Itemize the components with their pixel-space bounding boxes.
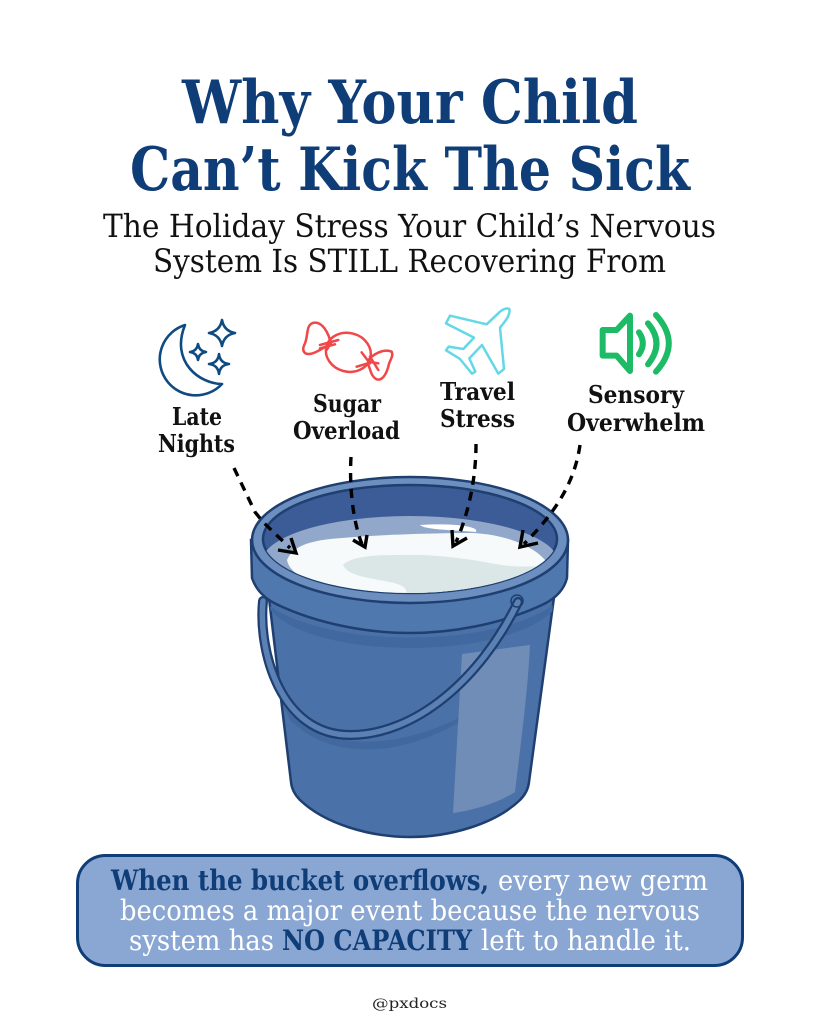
bucket handle bbox=[262, 595, 523, 735]
callout line 1: every new germ bbox=[498, 864, 708, 897]
label: Late Nights: Nights bbox=[158, 429, 235, 458]
arrow: sensory overwhelm to bucket bbox=[520, 445, 580, 547]
bucket illustration bbox=[251, 477, 568, 837]
subtitle: The Holiday Stress Your Child’s Nervous bbox=[103, 207, 716, 245]
icon: candy bbox=[303, 323, 392, 380]
label: Sensory Overwhelm: Overwhelm bbox=[567, 408, 705, 437]
icon: speaker bbox=[603, 315, 669, 372]
footer handle: @pxdocs bbox=[372, 996, 447, 1012]
callout line 3: NO CAPACITY bbox=[282, 924, 473, 957]
bucket body bbox=[262, 590, 560, 837]
title: Can’t Kick The Sick bbox=[130, 135, 691, 205]
subtitle: System Is STILL Recovering From bbox=[153, 242, 666, 280]
icon: airplane bbox=[446, 308, 510, 374]
label: Sensory Overwhelm bbox=[567, 380, 705, 437]
label: Sugar Overload bbox=[293, 389, 400, 445]
label: Late Nights bbox=[158, 402, 235, 458]
label: Travel Stress: Travel bbox=[440, 377, 515, 406]
callout box bbox=[78, 856, 742, 966]
title bbox=[130, 68, 691, 205]
bucket rim top bbox=[252, 477, 568, 603]
bucket highlight bbox=[453, 645, 530, 813]
subtitle bbox=[103, 207, 716, 280]
callout line 2: becomes a major event because the nervous bbox=[120, 894, 700, 927]
title: Why Your Child bbox=[181, 68, 638, 138]
water surface bbox=[266, 516, 554, 593]
label: Sensory Overwhelm: Sensory bbox=[588, 380, 685, 409]
label: Travel Stress bbox=[440, 377, 515, 433]
arrow: sugar overload to bucket bbox=[351, 457, 367, 547]
callout line 3: left to handle it. bbox=[481, 924, 691, 957]
bucket interior bbox=[263, 485, 557, 593]
icon: moon and stars bbox=[160, 320, 235, 395]
callout line 3: system has bbox=[129, 924, 274, 957]
label: Travel Stress: Stress bbox=[440, 404, 515, 433]
label: Late Nights: Late bbox=[172, 402, 222, 431]
bucket rim band bbox=[251, 540, 568, 633]
arrow: late nights to bucket bbox=[234, 468, 296, 553]
callout line 3 bbox=[129, 924, 691, 957]
callout line 1: When the bucket overflows, bbox=[110, 864, 489, 897]
label: Sugar Overload: Sugar bbox=[313, 389, 381, 418]
label: Sugar Overload: Overload bbox=[293, 416, 400, 445]
arrow: travel stress to bucket bbox=[452, 444, 476, 546]
